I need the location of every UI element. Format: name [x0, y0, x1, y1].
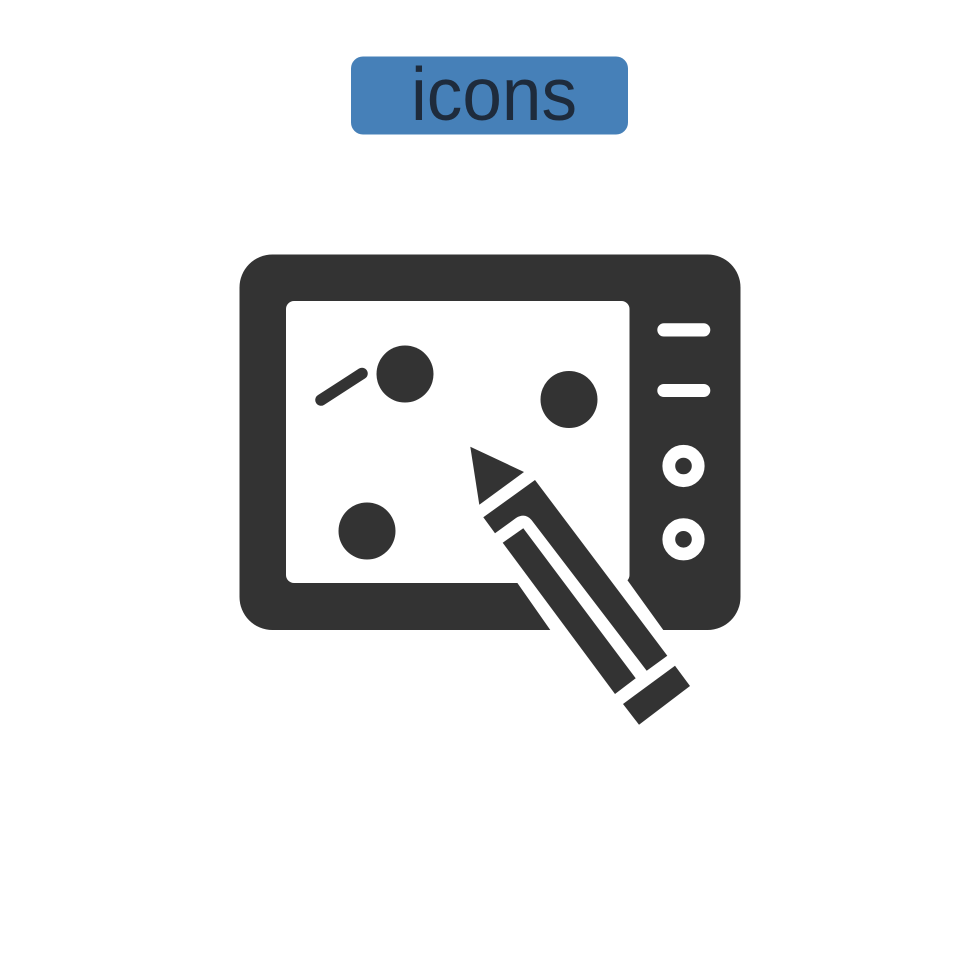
pencil inner strip — [503, 528, 636, 694]
dot: right — [540, 371, 598, 428]
pencil — [470, 447, 690, 725]
badge: icons title — [351, 52, 628, 136]
button: second pill — [657, 384, 710, 397]
pencil outer body — [483, 480, 667, 671]
button: lower ring — [669, 525, 698, 554]
pencil eraser — [623, 666, 690, 725]
tablet body — [240, 254, 740, 631]
dot: lower left — [338, 502, 396, 560]
tablet screen — [286, 301, 630, 583]
pencil clearance cutout — [517, 560, 664, 631]
icon: drawing tablet with pencil — [240, 254, 740, 725]
screen marks — [321, 346, 598, 560]
dash beside top dot — [321, 374, 362, 400]
dot: top — [376, 346, 434, 402]
button: upper ring — [669, 451, 698, 481]
title: icons: icons — [411, 52, 577, 136]
tablet buttons — [657, 323, 710, 554]
pencil tip — [470, 447, 524, 505]
button: top pill — [657, 323, 710, 336]
